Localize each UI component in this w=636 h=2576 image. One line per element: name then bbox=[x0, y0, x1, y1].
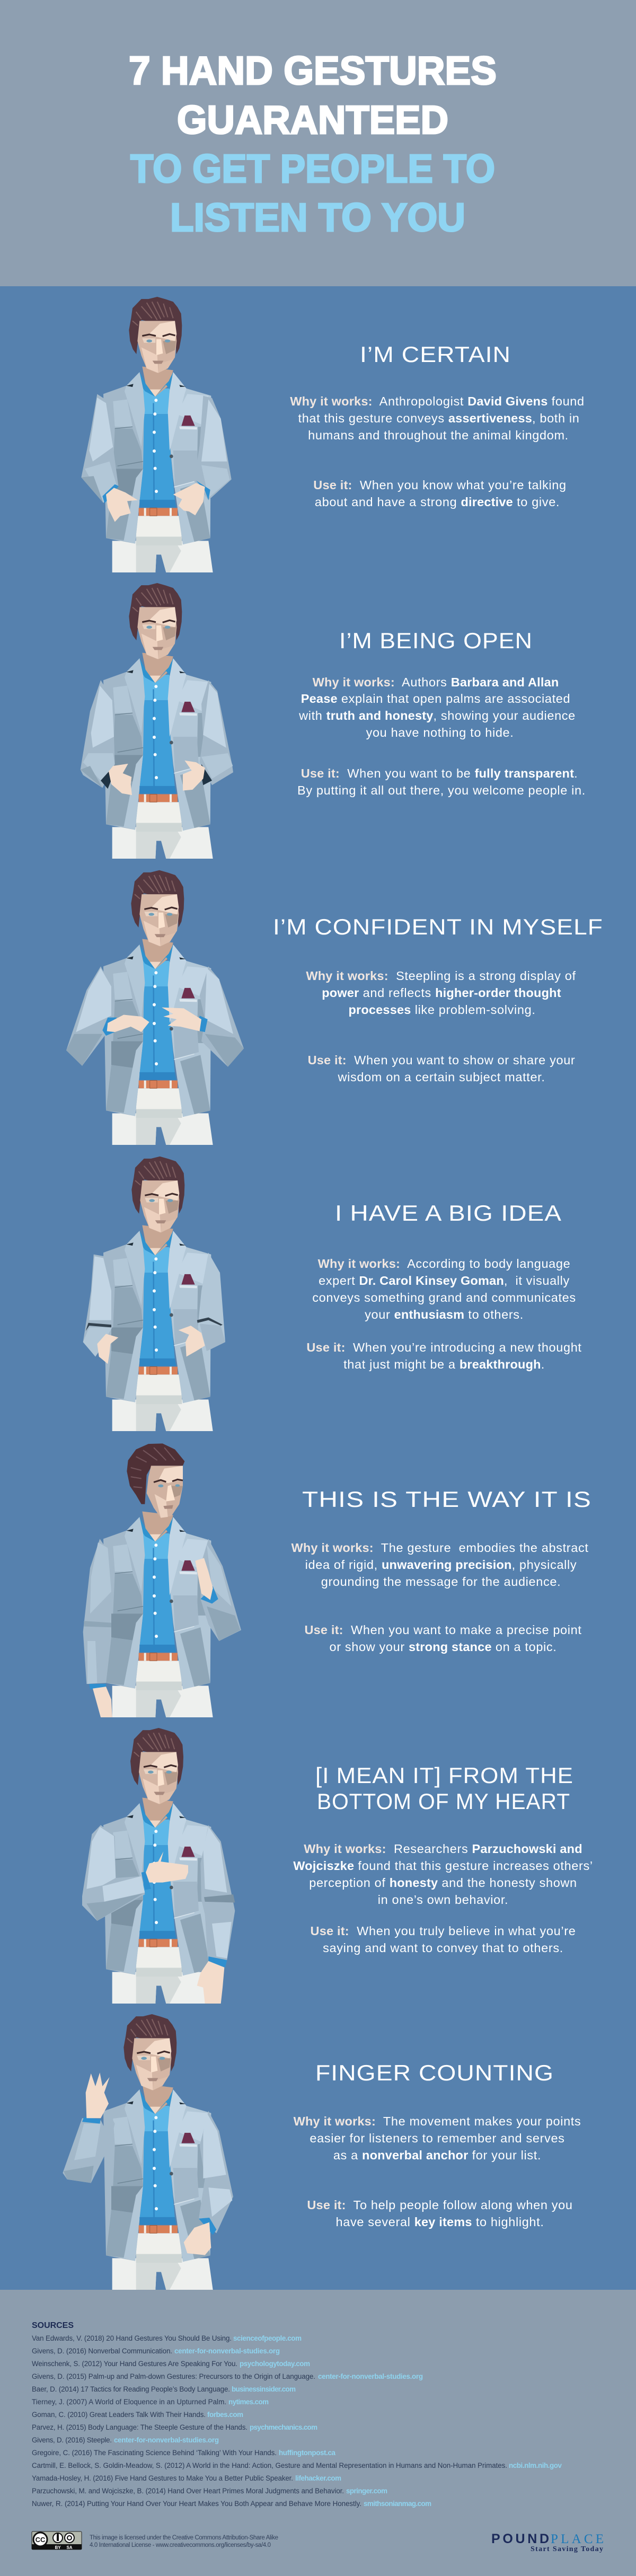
title: 7 HAND GESTURES bbox=[129, 48, 497, 93]
sources list: Baer, D. (2014) 17 Tactics for Reading People’s Body Language. bbox=[32, 2385, 230, 2393]
logo: pound place: POUND bbox=[491, 2531, 549, 2546]
license text: 4.0 International License - www.creativecommons.org/licenses/by-sa/4.0 bbox=[90, 2542, 271, 2548]
icon: creative commons badge: SA bbox=[66, 2545, 73, 2550]
use it: Use it: When you know what you’re talking bbox=[313, 478, 567, 492]
sources list: forbes.com bbox=[207, 2411, 243, 2419]
text: this is the way it is bbox=[291, 1487, 591, 1654]
sources list bbox=[32, 2334, 562, 2508]
why it works: with truth and honesty, showing your audience bbox=[298, 709, 576, 722]
why it works bbox=[291, 1541, 589, 1589]
heading: [I MEAN IT] FROM THE bbox=[315, 1763, 573, 1788]
sources list: center-for-nonverbal-studies.org bbox=[318, 2372, 423, 2380]
sources list: lifehacker.com bbox=[295, 2474, 341, 2482]
right arm and hand bbox=[197, 1825, 235, 2004]
why it works bbox=[312, 1257, 576, 1321]
why it works: grounding the message for the audience. bbox=[321, 1575, 561, 1589]
license text: This image is licensed under the Creative Commons Attribution-Share Alike bbox=[90, 2535, 278, 2541]
why it works: humans and throughout the animal kingdom. bbox=[308, 428, 569, 442]
use it: Use it: When you’re introducing a new thought bbox=[306, 1340, 582, 1354]
sources heading: SOURCES bbox=[32, 2321, 74, 2330]
use it bbox=[308, 1053, 575, 1084]
title: LISTEN TO YOU bbox=[170, 195, 465, 240]
left arm and hand bbox=[83, 1255, 118, 1364]
use it bbox=[313, 478, 567, 509]
why it works: Pease explain that open palms are associated bbox=[301, 692, 570, 705]
why it works: processes like problem-solving. bbox=[348, 1003, 536, 1017]
title: GUARANTEED bbox=[177, 98, 448, 142]
left arm and hand bbox=[66, 966, 149, 1066]
why it works: Wojciszke found that this gesture increases others’ bbox=[293, 1859, 593, 1873]
sources list: Parvez, H. (2015) Body Language: The Steeple Gesture of the Hands. bbox=[32, 2423, 248, 2431]
heading: BOTTOM OF MY HEART bbox=[317, 1789, 570, 1814]
heading: I’M CERTAIN bbox=[360, 342, 511, 367]
sources list: Yamada-Hosley, H. (2016) Five Hand Gestures to Make You a Better Public Speaker. bbox=[32, 2474, 293, 2482]
sources list: springer.com bbox=[346, 2487, 387, 2495]
use it: Use it: When you want to show or share your bbox=[308, 1053, 575, 1067]
sources list: huffingtonpost.ca bbox=[279, 2449, 336, 2457]
why it works: Why it works: Authors Barbara and Allan bbox=[313, 675, 559, 689]
why it works: power and reflects higher-order thought bbox=[322, 986, 561, 1000]
why it works: Why it works: Steepling is a strong display of bbox=[306, 969, 576, 983]
why it works: idea of rigid, unwavering precision, physically bbox=[305, 1558, 577, 1572]
why it works bbox=[294, 2114, 581, 2162]
sources list: Givens, D. (2016) Steeple. bbox=[32, 2436, 112, 2444]
heading: I’M CONFIDENT IN MYSELF bbox=[273, 914, 603, 939]
text: I'm being open bbox=[297, 628, 586, 797]
why it works bbox=[290, 394, 585, 442]
why it works: expert Dr. Carol Kinsey Goman, it visually bbox=[319, 1274, 570, 1287]
right arm and hand bbox=[183, 680, 233, 791]
illustration: I'm confident in myself figure bbox=[66, 870, 244, 1145]
sources list: Van Edwards, V. (2018) 20 Hand Gestures You Should Be Using. bbox=[32, 2334, 232, 2342]
title: TO GET PEOPLE TO bbox=[130, 146, 495, 191]
heading bbox=[315, 1763, 573, 1814]
heading: FINGER COUNTING bbox=[315, 2060, 554, 2085]
why it works bbox=[298, 675, 576, 739]
why it works: perception of honesty and the honesty shown bbox=[309, 1876, 577, 1890]
why it works: your enthusiasm to others. bbox=[365, 1308, 524, 1321]
illustration: I have a big idea figure bbox=[83, 1157, 225, 1431]
sources list: scienceofpeople.com bbox=[233, 2334, 302, 2342]
sources list: center-for-nonverbal-studies.org bbox=[174, 2347, 280, 2355]
logo: pound place: Start Saving Today bbox=[531, 2545, 603, 2553]
text: finger counting bbox=[294, 2060, 581, 2229]
use it: By putting it all out there, you welcome people in. bbox=[297, 783, 586, 797]
right arm and hand bbox=[179, 1252, 225, 1356]
right arm and hand bbox=[195, 1539, 241, 1641]
use it: saying and want to convey that to others. bbox=[323, 1941, 563, 1955]
why it works: as a nonverbal anchor for your list. bbox=[333, 2148, 541, 2162]
sources list: Tierney, J. (2007) A World of Eloquence in an Upturned Palm. bbox=[32, 2398, 226, 2406]
use it: Use it: When you want to be fully transparent. bbox=[301, 766, 578, 780]
illustration: this is the way it is figure bbox=[83, 1443, 241, 1717]
right arm and hand bbox=[162, 966, 244, 1067]
use it: that just might be a breakthrough. bbox=[343, 1357, 545, 1371]
use it bbox=[297, 766, 586, 797]
use it: Use it: When you truly believe in what you’re bbox=[311, 1924, 576, 1938]
why it works: you have nothing to hide. bbox=[366, 726, 514, 739]
use it: about and have a strong directive to give. bbox=[315, 495, 560, 509]
use it: Use it: To help people follow along when you bbox=[307, 2198, 573, 2212]
title bbox=[129, 48, 497, 240]
use it: wisdom on a certain subject matter. bbox=[337, 1070, 545, 1084]
text: I have a big idea bbox=[306, 1201, 582, 1371]
heading: THIS IS THE WAY IT IS bbox=[302, 1487, 591, 1512]
why it works: in one’s own behavior. bbox=[378, 1893, 508, 1907]
footer panel bbox=[0, 2290, 636, 2576]
illustration: I'm being open figure bbox=[81, 583, 233, 859]
why it works: conveys something grand and communicates bbox=[312, 1291, 576, 1304]
why it works: Why it works: According to body language bbox=[318, 1257, 570, 1271]
license text bbox=[90, 2535, 278, 2548]
header panel bbox=[0, 0, 636, 286]
raised arm and three fingers bbox=[63, 2072, 115, 2183]
sources list: Goman, C. (2010) Great Leaders Talk With Their Hands. bbox=[32, 2411, 206, 2419]
sources list: Nuwer, R. (2014) Putting Your Hand Over Your Heart Makes You Both Appear and Behave More Honestly. bbox=[32, 2500, 361, 2508]
text: I'm confident in myself bbox=[273, 914, 603, 1084]
heading: I HAVE A BIG IDEA bbox=[335, 1201, 562, 1225]
use it bbox=[304, 1623, 582, 1654]
sources list: smithsonianmag.com bbox=[364, 2500, 431, 2508]
sources list: Givens, D. (2015) Palm-up and Palm-down Gestures: Precursors to the Origin of Language. bbox=[32, 2372, 315, 2380]
right arm and hand bbox=[184, 2111, 233, 2255]
illustration: from the bottom of my heart figure bbox=[82, 1728, 235, 2004]
why it works: Why it works: Researchers Parzuchowski and bbox=[304, 1842, 582, 1856]
sources list: Weinschenk, S. (2012) Your Hand Gestures Are Speaking For You. bbox=[32, 2360, 237, 2368]
use it bbox=[307, 2198, 573, 2229]
sources list: ncbi.nlm.nih.gov bbox=[509, 2462, 562, 2469]
sources list: Cartmill, E. Bellock, S. Goldin-Meadow, S. (2012) A World in the Hand: Action, Gesture and Mental Representation in Humans and Non-Human Primates. bbox=[32, 2462, 507, 2469]
why it works: Why it works: Anthropologist David Givens found bbox=[290, 394, 585, 408]
sources list: businessinsider.com bbox=[232, 2385, 296, 2393]
sources list: psychmechanics.com bbox=[250, 2423, 317, 2431]
sources list: Parzuchowski, M. and Wojciszke, B. (2014) Hand Over Heart Primes Moral Judgments and Behavior. bbox=[32, 2487, 344, 2495]
why it works: Why it works: The movement makes your points bbox=[294, 2114, 581, 2128]
sources list: Gregoire, C. (2016) The Fascinating Science Behind ‘Talking’ With Your Hands. bbox=[32, 2449, 277, 2457]
gestures background panel bbox=[0, 286, 636, 2290]
illustration: finger counting figure bbox=[63, 2014, 233, 2290]
icon: creative commons badge bbox=[32, 2531, 82, 2550]
use it bbox=[306, 1340, 582, 1371]
sources list: psychologytoday.com bbox=[240, 2360, 310, 2368]
use it: or show your strong stance on a topic. bbox=[330, 1640, 556, 1654]
use it bbox=[311, 1924, 576, 1955]
sources list: center-for-nonverbal-studies.org bbox=[114, 2436, 219, 2444]
left arm and hand bbox=[83, 1539, 113, 1717]
icon: creative commons badge: BY bbox=[55, 2545, 61, 2550]
left arm and hand bbox=[81, 394, 138, 522]
heading: I’M BEING OPEN bbox=[339, 628, 533, 653]
text: from the bottom of my heart bbox=[293, 1763, 593, 1955]
sources list: nytimes.com bbox=[228, 2398, 269, 2406]
why it works bbox=[306, 969, 576, 1017]
left arm and hand on heart bbox=[82, 1825, 188, 1921]
use it: have several key items to highlight. bbox=[336, 2215, 544, 2229]
why it works bbox=[293, 1842, 593, 1907]
why it works: Why it works: The gesture embodies the abstract bbox=[291, 1541, 589, 1555]
sources list: Givens, D. (2016) Nonverbal Communication. bbox=[32, 2347, 172, 2355]
icon: creative commons badge: CC bbox=[36, 2536, 46, 2544]
use it: Use it: When you want to make a precise point bbox=[304, 1623, 582, 1637]
right arm and hand bbox=[173, 396, 232, 515]
logo: pound place bbox=[491, 2531, 604, 2553]
why it works: easier for listeners to remember and serves bbox=[310, 2131, 565, 2145]
illustration: I'm certain figure bbox=[81, 297, 232, 572]
logo: pound place: PLACE bbox=[551, 2532, 604, 2546]
why it works: that this gesture conveys assertiveness, both in bbox=[298, 411, 579, 425]
left arm and hand bbox=[81, 680, 132, 795]
text: I'm certain bbox=[290, 342, 585, 509]
